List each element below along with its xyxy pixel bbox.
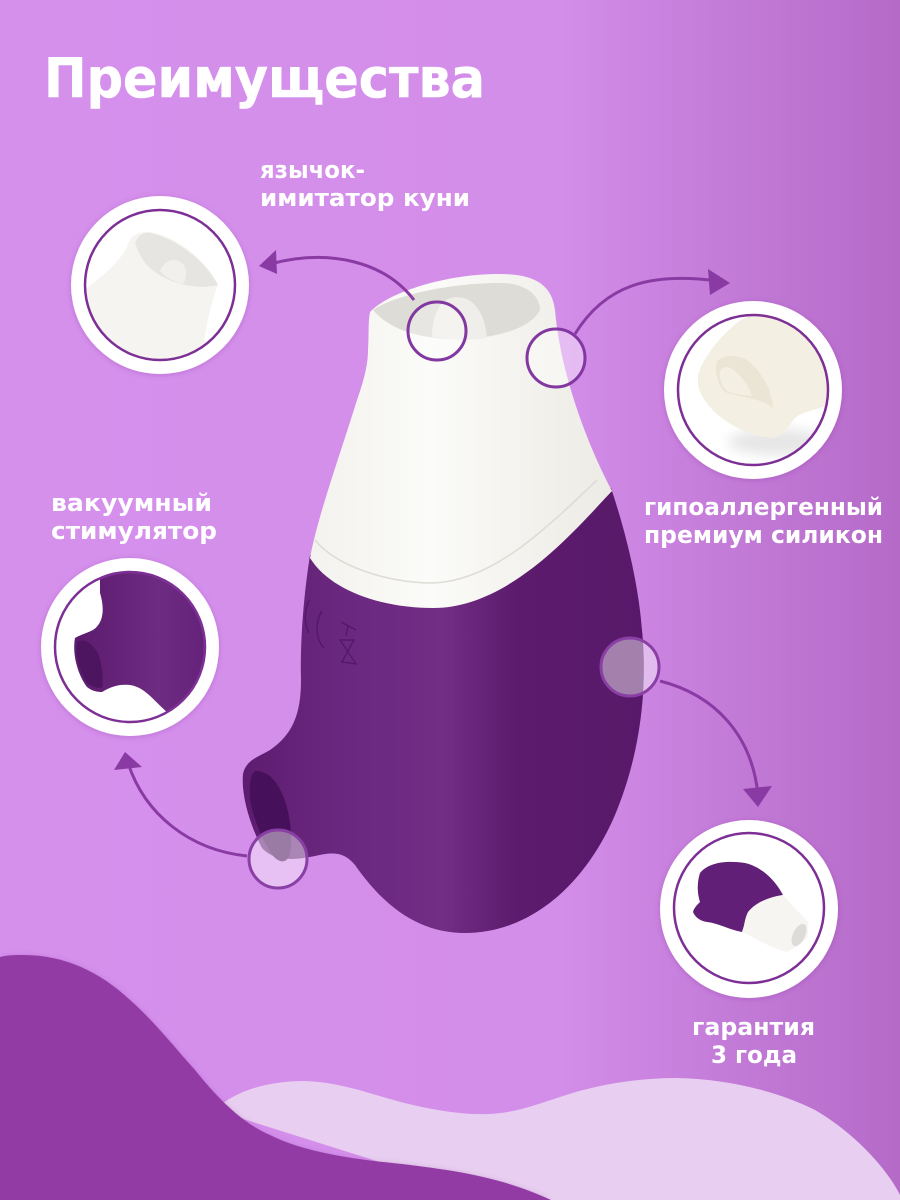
product: white top [310,274,612,608]
detail circle: vacuum [41,558,219,736]
label: warranty [692,1013,815,1069]
ring: tongue [408,302,466,360]
arrow: warranty [660,681,772,807]
mini product [693,862,810,952]
tongue close-up [86,232,218,358]
nozzle close-up [74,573,204,712]
arrow: silicone [575,269,730,334]
label: tongue: язычок- [260,156,365,184]
arrow: vacuum [114,752,247,856]
arrow: tongue [259,250,414,300]
product: collar seam [315,480,597,583]
label: silicone: премиум силикон [644,521,883,549]
ring: warranty [601,638,659,696]
shadow under silicone tip [728,429,828,455]
product: top opening [373,283,540,339]
label: tongue: имитатор куни [260,184,470,212]
silicone close-up [698,314,835,438]
detail circle: warranty [660,820,838,998]
product: tongue [432,297,487,340]
ring: silicone [527,329,585,387]
wave: light lilac bottom [215,1078,900,1200]
label: silicone [644,493,883,549]
detail circle: silicone [664,301,842,479]
label: vacuum: вакуумный [51,489,212,517]
product: nozzle opening [250,771,291,861]
callout rings on product [249,302,659,888]
label: tongue [260,156,470,212]
wave: dark purple bottom left [0,955,551,1200]
label: vacuum [51,489,217,545]
title: Преимущества [44,47,485,110]
detail circle: tongue [71,196,249,380]
product [243,274,644,933]
label: vacuum: стимулятор [51,517,217,545]
product: purple body [243,488,644,933]
label: warranty: 3 года [711,1041,797,1069]
product: embossed marks [305,600,356,664]
label: silicone: гипоаллергенный [644,493,883,521]
label: warranty: гарантия [692,1013,815,1041]
ring: vacuum [249,830,307,888]
